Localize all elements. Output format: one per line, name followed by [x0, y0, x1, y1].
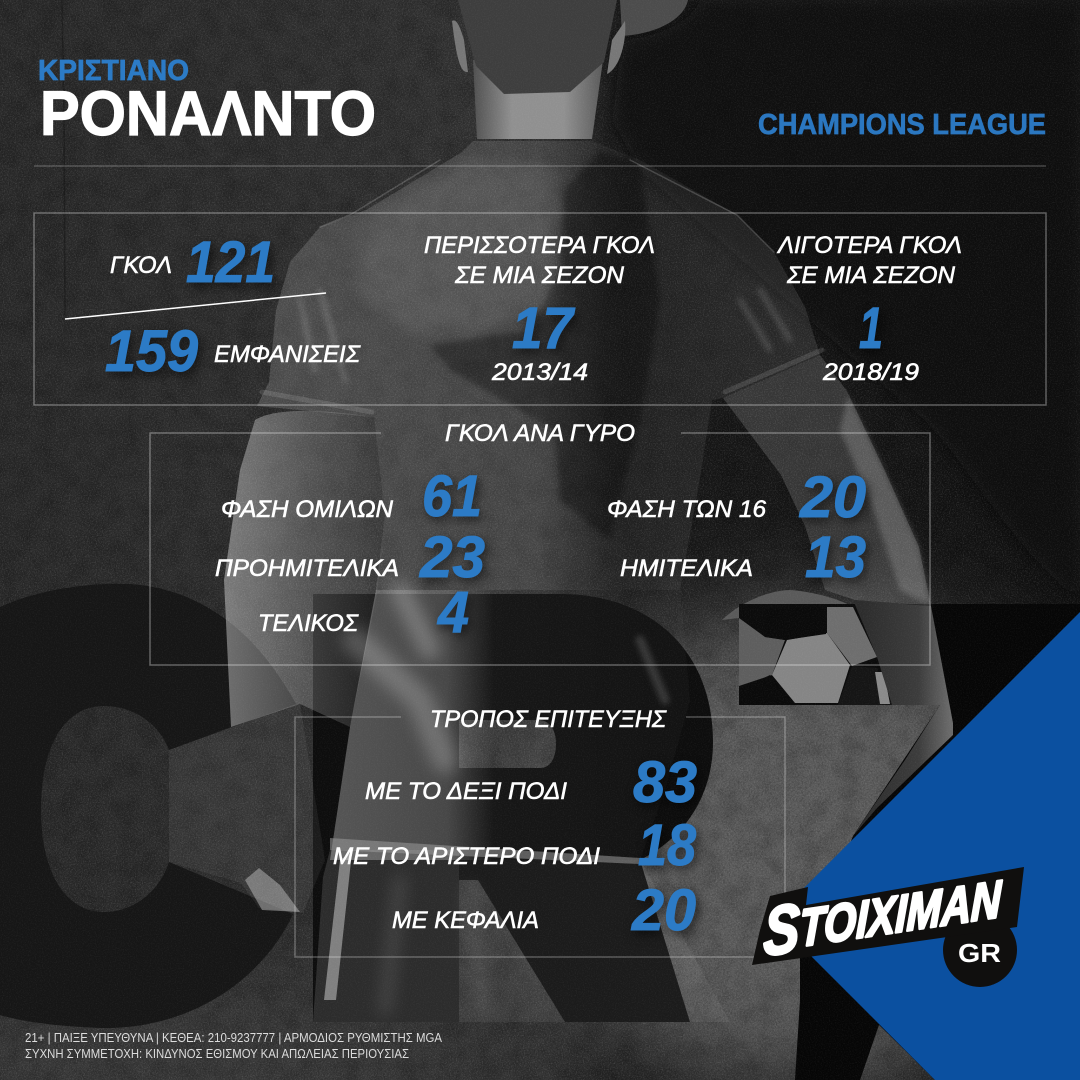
lower torso: [330, 590, 550, 860]
panel: totals and season records: 121: [186, 230, 275, 295]
panel: totals and season records: 2018/19: [822, 359, 919, 386]
shirt: [257, 141, 820, 590]
panel: goals per round: ΦΑΣΗ ΟΜΙΛΩΝ: [221, 496, 394, 523]
panel: goals per round: [150, 420, 930, 665]
panel: totals and season records: 1: [859, 296, 883, 361]
letter C: [0, 584, 296, 1028]
football: [722, 590, 899, 705]
letter 7: [739, 604, 1080, 1080]
panel: goals per round: ΦΑΣΗ ΤΩΝ 16: [607, 496, 767, 523]
forearm over ball: [853, 600, 953, 836]
logo: Stoiximan GR: TOIXIMAN: [799, 870, 1003, 959]
left arm: [169, 411, 385, 913]
panel: goals per round: ΓΚΟΛ ΑΝΑ ΓΥΡΟ: [445, 420, 635, 447]
panel: goals per round: 20: [799, 465, 866, 530]
logo: Stoiximan GR: [752, 858, 1024, 987]
panel: totals and season records: 159: [105, 319, 198, 384]
panel: method of scoring: 20: [631, 878, 696, 943]
panel: method of scoring: ΜΕ ΚΕΦΑΛΙΑ: [392, 907, 539, 934]
grain over photo: [224, 0, 953, 1022]
competition heading: CHAMPIONS LEAGUE: [758, 109, 1046, 141]
panel: totals and season records: 2013/14: [491, 359, 588, 386]
player photo silhouette: [169, 0, 931, 1022]
letter R: [313, 594, 713, 1022]
logo: Stoiximan GR: S: [763, 888, 801, 971]
right arm: [723, 355, 931, 606]
panel: method of scoring: ΜΕ ΤΟ ΑΡΙΣΤΕΡΟ ΠΟΔΙ: [333, 843, 600, 870]
logo: Stoiximan GR: GR: [958, 938, 1001, 968]
panel: totals and season records: ΛΙΓΟΤΕΡΑ ΓΚΟΛ: [776, 232, 962, 259]
panel: goals per round: 23: [419, 525, 485, 590]
blue corner triangle: [800, 612, 1080, 1080]
neck: [473, 60, 603, 139]
panel: totals and season records: ΕΜΦΑΝΙΣΕΙΣ: [214, 341, 362, 368]
panel: method of scoring: ΤΡΟΠΟΣ ΕΠΙΤΕΥΞΗΣ: [430, 706, 668, 733]
footer disclaimer: [25, 1031, 443, 1061]
shirt fold highlights: [262, 160, 822, 1010]
panel: goals per round: 13: [805, 525, 866, 590]
panel: totals and season records: ΓΚΟΛ: [110, 252, 172, 279]
footer disclaimer: ΣΥΧΝΗ ΣΥΜΜΕΤΟΧΗ: ΚΙΝΔΥΝΟΣ ΕΘΙΣΜΟΥ ΚΑΙ ΑΠΩΛΕΙΑΣ ΠΕΡΙΟΥΣΙΑΣ: [25, 1047, 409, 1061]
shorts: [313, 838, 730, 1022]
panel: goals per round: ΠΡΟΗΜΙΤΕΛΙΚΑ: [215, 555, 399, 582]
panel: method of scoring: 18: [638, 813, 697, 878]
panel: method of scoring: 83: [633, 750, 697, 815]
panel: totals and season records: 17: [512, 296, 576, 361]
panel: totals and season records: ΣΕ ΜΙΑ ΣΕΖΟΝ: [454, 262, 625, 289]
panel: goals per round: ΗΜΙΤΕΛΙΚΑ: [620, 555, 753, 582]
panel: goals per round: 4: [437, 580, 469, 645]
panel: goals per round: ΤΕΛΙΚΟΣ: [258, 610, 360, 637]
panel: goals per round: 61: [422, 464, 482, 529]
panel: totals and season records: [34, 213, 1046, 405]
panel: method of scoring: ΜΕ ΤΟ ΔΕΞΙ ΠΟΔΙ: [365, 778, 567, 805]
header rule: [34, 165, 1046, 167]
footer disclaimer: 21+ | ΠΑΙΞΕ ΥΠΕΥΘΥΝΑ | ΚΕΘΕΑ: 210-9237777 | ΑΡΜΟΔΙΟΣ ΡΥΘΜΙΣΤΗΣ MGA: [25, 1031, 443, 1045]
title: ΡΟΝΑΛΝΤΟ: [40, 79, 376, 149]
panel: totals and season records: ΣΕ ΜΙΑ ΣΕΖΟΝ: [786, 262, 956, 289]
big letters CR7 backdrop: [0, 584, 1080, 1080]
head hair and ears: [452, 0, 625, 94]
panel: totals and season records: ΠΕΡΙΣΣΟΤΕΡΑ ΓΚΟΛ: [424, 232, 655, 259]
title: ΚΡΙΣΤΙΑΝΟ: [38, 55, 189, 87]
panel: method of scoring: [295, 706, 785, 957]
